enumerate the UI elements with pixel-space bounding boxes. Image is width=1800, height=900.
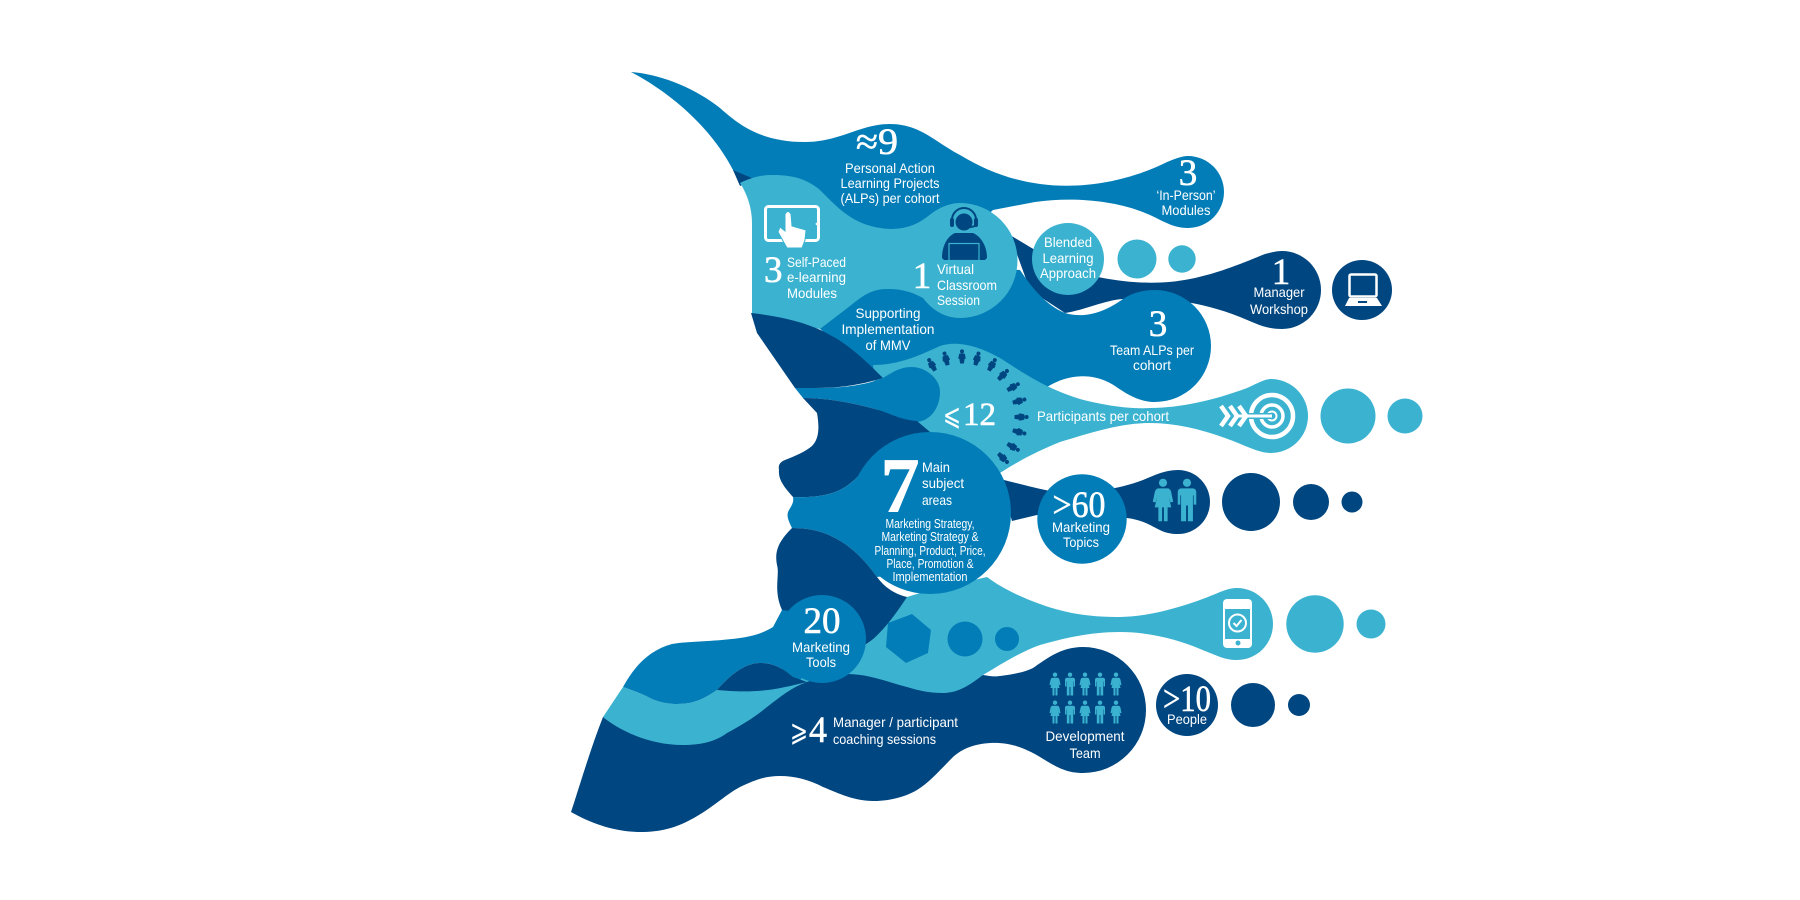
text: team ALPs: cohort	[1133, 357, 1171, 373]
text: more than ten people: >10	[1163, 679, 1211, 720]
dots: participants trail	[1320, 388, 1422, 444]
ribbon: lower light band and phone	[603, 577, 1273, 770]
icon: laptop circle	[1332, 260, 1392, 320]
shape: mouth band	[788, 457, 930, 577]
shape: marketing tools band	[623, 610, 860, 704]
text: personal action learning projects	[840, 122, 940, 206]
text: team ALPs	[1110, 304, 1194, 373]
text: marketing topics	[1052, 485, 1110, 550]
text: self-paced modules: e-learning	[787, 269, 846, 285]
text: team ALPs: Team ALPs per	[1110, 342, 1194, 358]
text: in-person modules	[1156, 153, 1216, 218]
text: personal action learning projects: (ALPs) per cohort	[840, 190, 940, 206]
text: main subject areas: areas	[922, 492, 952, 508]
icon: ring of participants	[925, 349, 1029, 466]
icon: development team people	[1050, 672, 1122, 724]
text: coaching sessions: 4	[809, 710, 827, 751]
dots: phone trail	[1286, 595, 1386, 653]
text: main subject areas: Marketing Strategy,	[886, 517, 974, 531]
text: manager workshop: Workshop	[1250, 301, 1308, 317]
text: marketing topics: >60	[1052, 485, 1106, 526]
text: main subject areas: Implementation	[892, 570, 968, 584]
shape: dark chin and neck	[776, 528, 930, 660]
text: coaching sessions: Manager / participant	[833, 714, 958, 730]
text: manager workshop	[1250, 252, 1308, 317]
ribbon: marketing topics and couple	[1000, 470, 1210, 534]
text: participants per cohort: ⩽	[943, 398, 961, 433]
dots: blended learning trail	[1118, 240, 1196, 278]
text: marketing topics: Topics	[1063, 534, 1099, 550]
text: blended learning approach: Approach	[1040, 265, 1096, 281]
dots: marketing tools trail	[886, 614, 1019, 663]
text: main subject areas: Place, Promotion &	[886, 557, 974, 571]
text: main subject areas: subject	[922, 475, 964, 491]
circle: marketing topics	[1037, 474, 1127, 564]
ribbon: manager workshop	[1010, 235, 1321, 329]
text: personal action learning projects: Personal Action	[845, 160, 935, 176]
text: blended learning approach: Learning	[1042, 250, 1094, 266]
text: self-paced modules	[764, 250, 846, 301]
text: self-paced modules: Modules	[787, 285, 837, 301]
text: main subject areas: Planning, Product, Price,	[874, 544, 986, 558]
text: personal action learning projects: Learning Projects	[840, 175, 940, 191]
circle: marketing tools	[778, 595, 866, 683]
text: marketing tools	[792, 601, 850, 670]
text: more than ten people: People	[1167, 711, 1207, 727]
text: marketing topics: Marketing	[1052, 519, 1110, 535]
text: main subject areas: Marketing Strategy &	[882, 530, 979, 544]
text: development team: Team	[1070, 745, 1100, 761]
text: team ALPs: 3	[1149, 304, 1167, 345]
text: blended learning approach: Blended	[1044, 234, 1092, 250]
text: virtual classroom session: Virtual	[937, 261, 974, 277]
text: participants per cohort: 12	[963, 397, 996, 433]
text: in-person modules: Modules	[1162, 202, 1210, 218]
text: participants per cohort	[943, 397, 1169, 433]
text: main subject areas: 7	[880, 442, 920, 529]
icon: target with arrow	[1221, 395, 1293, 437]
text: supporting implementation: Supporting	[856, 305, 920, 321]
icon: couple	[1153, 479, 1196, 521]
shape: dark nose region	[779, 398, 930, 497]
text: coaching sessions	[790, 710, 958, 751]
text: coaching sessions: coaching sessions	[833, 731, 936, 747]
text: virtual classroom session: 1	[913, 256, 931, 297]
ribbon: development team base	[571, 647, 1146, 832]
ribbon: in-person modules	[631, 72, 1224, 240]
icon: tablet with hand	[766, 206, 818, 248]
text: manager workshop: Manager	[1254, 284, 1305, 300]
ribbon: team ALPs	[820, 260, 1211, 402]
text: main subject areas	[874, 442, 986, 584]
wedge: dark below tools	[717, 663, 807, 691]
text: participants per cohort: Participants per cohort	[1037, 408, 1169, 424]
circle: blended learning	[1032, 223, 1104, 295]
text: marketing tools: 20	[804, 601, 840, 642]
text: manager workshop: 1	[1272, 252, 1290, 293]
text: supporting implementation	[842, 305, 934, 353]
text: virtual classroom session: Session	[937, 292, 980, 308]
text: in-person modules: 3	[1179, 153, 1197, 194]
text: supporting implementation: Implementation	[842, 321, 934, 337]
text: marketing tools: Marketing	[792, 639, 850, 655]
shape: mid band with blob	[795, 367, 940, 422]
text: development team	[1046, 728, 1125, 761]
text: marketing tools: Tools	[806, 654, 836, 670]
text: self-paced modules: 3	[764, 250, 782, 291]
text: virtual classroom session	[913, 256, 997, 308]
text: personal action learning projects: ≈9	[856, 122, 898, 163]
text: coaching sessions: ⩾	[790, 714, 808, 749]
panel: e-learning and virtual classroom	[740, 175, 1018, 329]
text: in-person modules: ‘In-Person’	[1156, 187, 1216, 203]
text: virtual classroom session: Classroom	[937, 277, 997, 293]
ribbon: participants per cohort	[873, 344, 1308, 500]
circle: main subject areas	[849, 432, 1011, 594]
shape: dark forehead	[751, 313, 883, 388]
dots: marketing topics trail	[1222, 473, 1362, 531]
text: self-paced modules: Self-Paced	[787, 254, 846, 270]
wedge: dark forehead tip	[733, 170, 754, 186]
dots: people trail	[1156, 674, 1310, 736]
text: supporting implementation: of MMV	[866, 337, 911, 353]
text: main subject areas: Main	[922, 459, 950, 475]
icon: headset person	[942, 208, 987, 260]
icon: smartphone	[1223, 599, 1252, 648]
text: development team: Development	[1046, 728, 1125, 744]
text: blended learning approach	[1040, 234, 1096, 281]
